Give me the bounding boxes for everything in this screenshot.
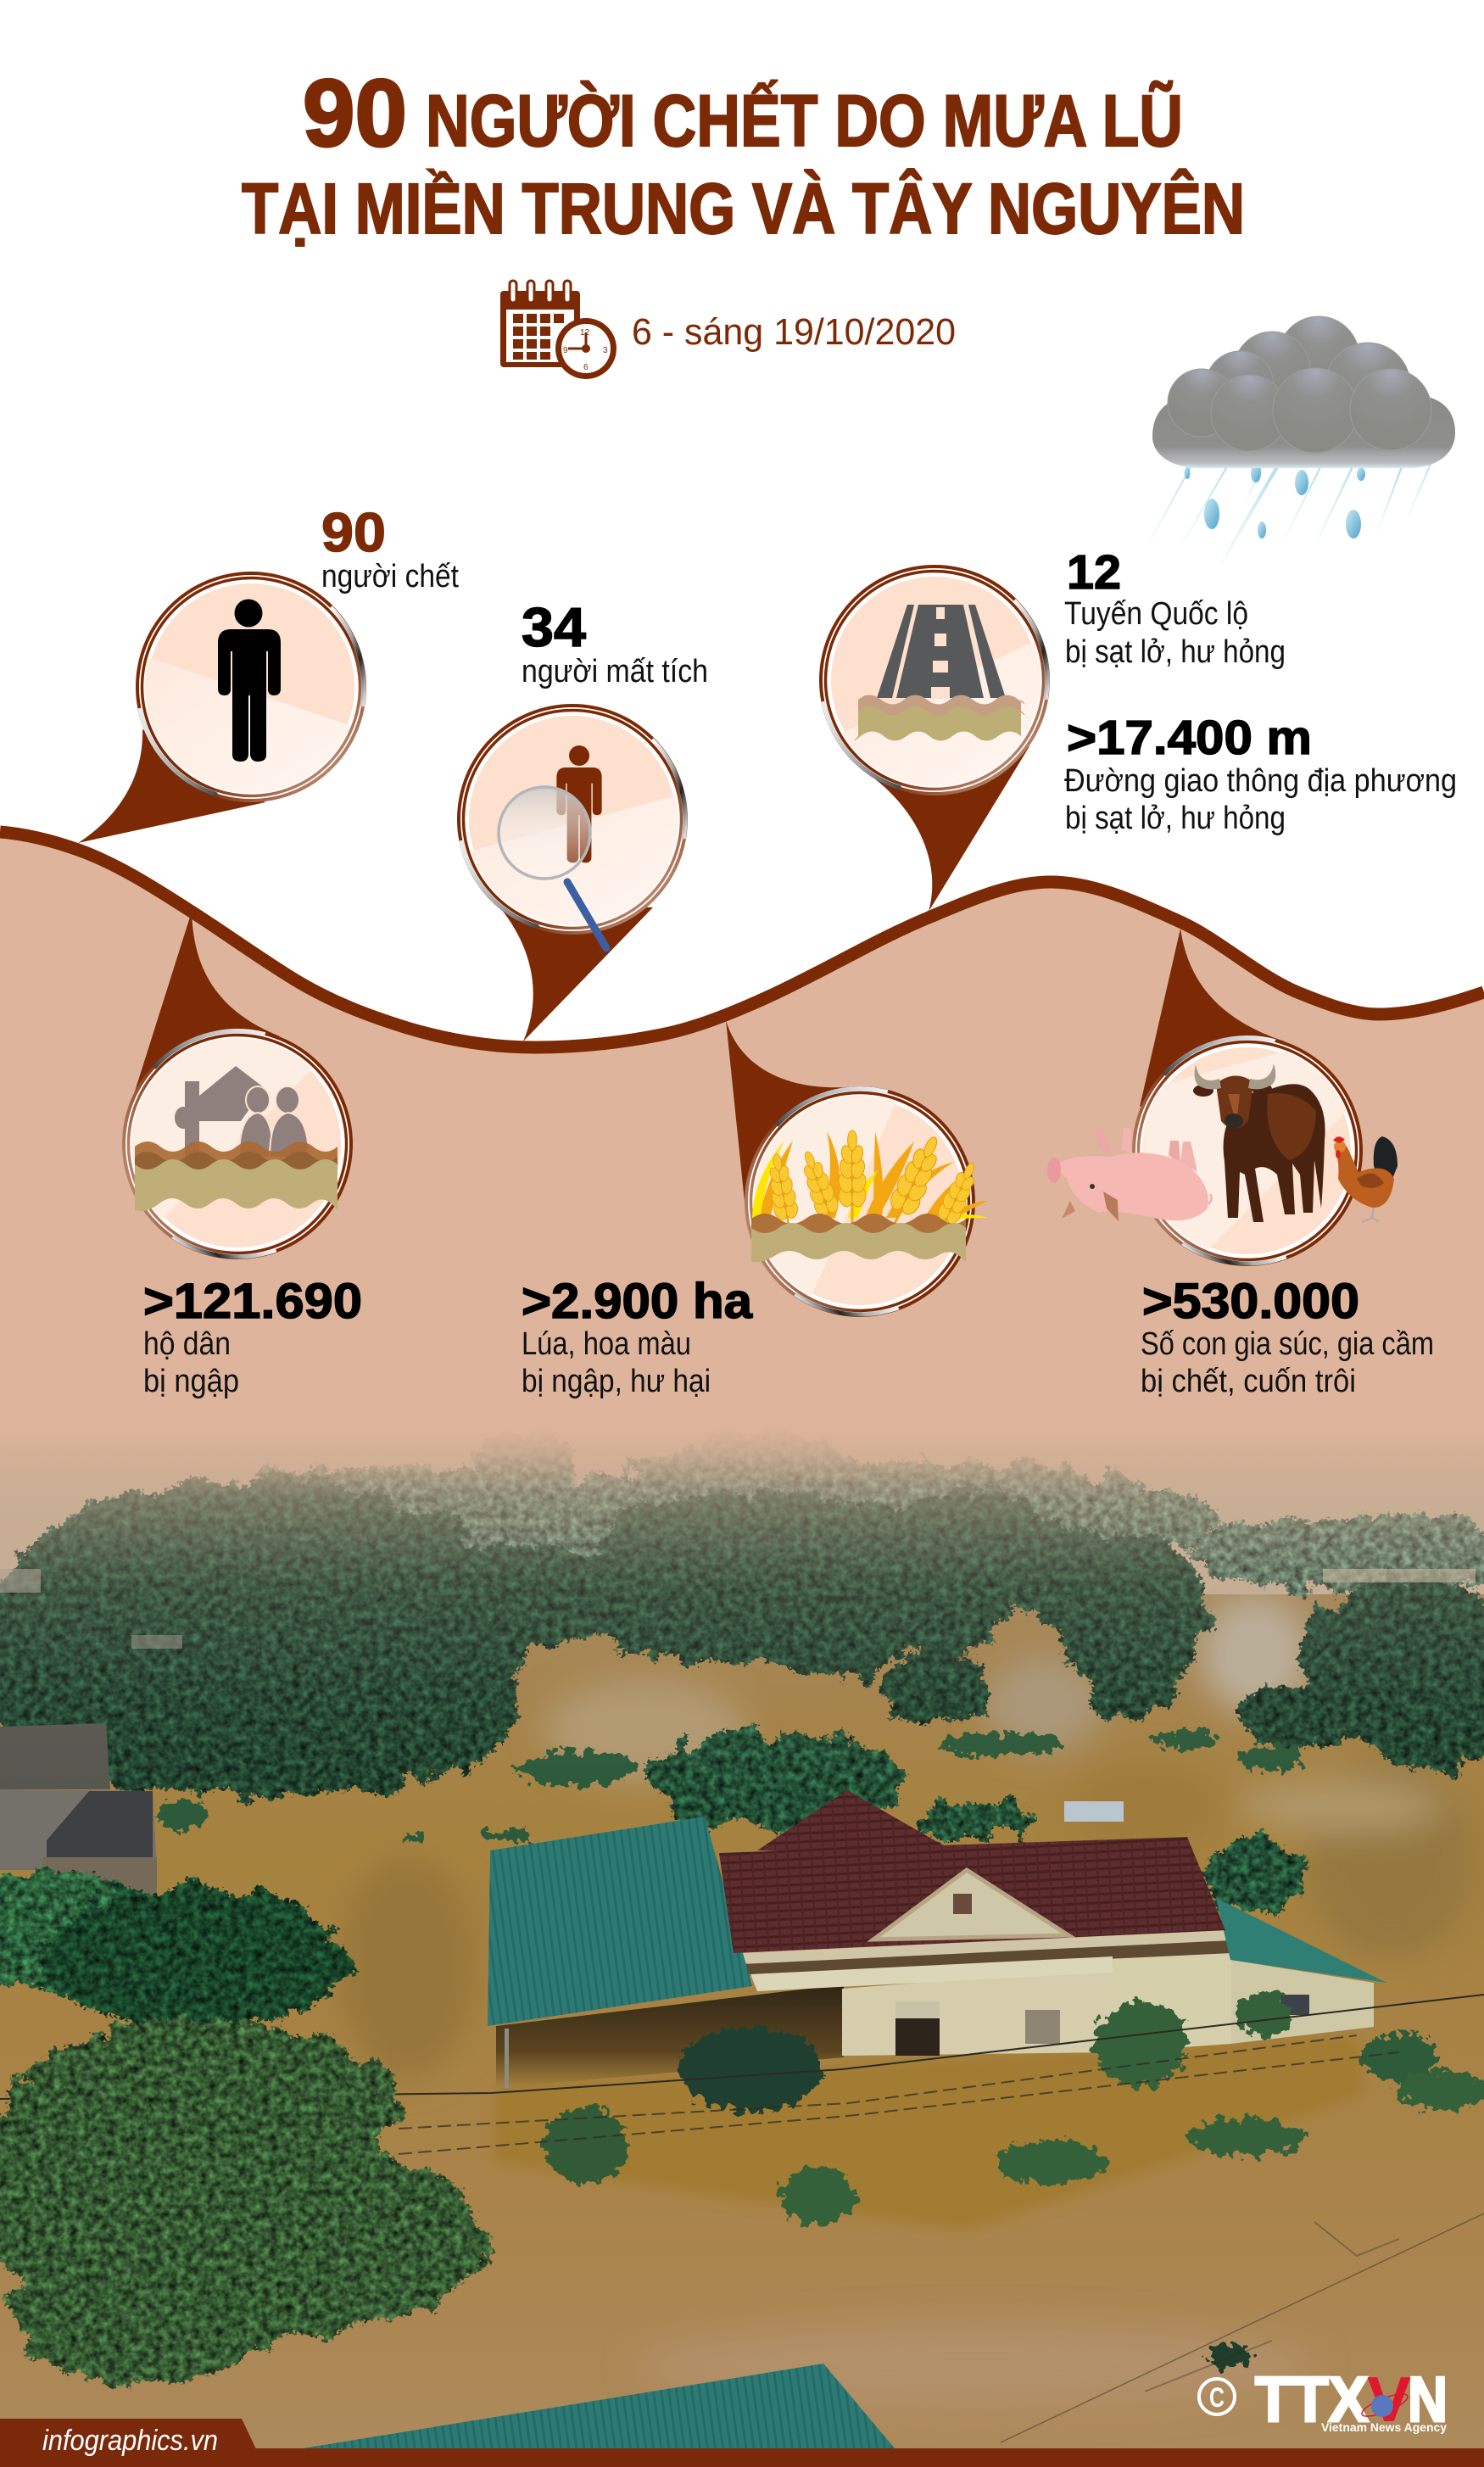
logo: TTXVN: N [1408, 2364, 1448, 2435]
stat: damaged crops: bị ngập, hư hại [522, 1364, 711, 1399]
flood photograph [0, 1425, 1484, 2467]
panel: people killed [78, 572, 366, 843]
tan terrain area [0, 832, 1484, 1459]
logo: TTXVN: Vietnam News Agency [1321, 2420, 1447, 2434]
pin disc [819, 565, 1050, 795]
upper tree masses [0, 1476, 1484, 1798]
source tag: infographics.vn [42, 2425, 218, 2457]
pin tail [78, 729, 265, 843]
bush and shrubs in front of house [543, 1992, 1484, 2369]
bottom teal roof [303, 2364, 895, 2448]
wave outline [0, 832, 1484, 1047]
icon: calendar and clock: 12 [580, 328, 590, 338]
icon: flooded house and people [135, 1066, 338, 1211]
pin tail [496, 903, 653, 1041]
icon: cow [1193, 1063, 1325, 1222]
utility wires [0, 1995, 1484, 2442]
pin tail [134, 912, 280, 1094]
pin disc [84, 991, 391, 1298]
stat: national roads and local roads [1064, 545, 1457, 836]
icon: calendar and clock: 9 [563, 346, 568, 355]
source tag [0, 2419, 257, 2467]
left buildings [0, 1723, 157, 1908]
logo: TTXVN [1199, 2364, 1448, 2435]
tree behind the house [649, 1732, 1310, 1910]
stat: flooded households [143, 1274, 362, 1399]
pin disc [136, 572, 366, 802]
stat: national roads and local roads: 12 [1067, 545, 1121, 600]
stat: national roads and local roads: Tuyến Quốc lộ [1064, 596, 1248, 632]
pin disc [1094, 997, 1401, 1304]
distant tree line [59, 1429, 1484, 1603]
icon: person [218, 629, 281, 762]
stat: damaged crops [522, 1274, 753, 1399]
house [488, 1790, 1386, 2088]
pin gloss [750, 1091, 901, 1312]
house reflection in water [494, 2035, 1365, 2230]
icon: pig [1047, 1127, 1212, 1221]
pin disc [706, 1048, 1013, 1355]
pin tail [873, 746, 1029, 912]
stat: national roads and local roads: bị sạt lở, hư hỏng [1065, 801, 1286, 836]
title: NGƯỜI CHẾT DO MƯA LŨ [426, 81, 1183, 162]
stat: damaged crops: >2.900 ha [522, 1274, 753, 1329]
icon: person head [234, 599, 263, 628]
far buildings [0, 1569, 1476, 1649]
pin tail [1140, 929, 1285, 1107]
stat: national roads and local roads: bị sạt lở, hư hỏng [1065, 634, 1286, 670]
logo: TTXVN: C [1209, 2382, 1225, 2413]
logo: TTXVN: V [1367, 2364, 1411, 2435]
pin tail [726, 1020, 890, 1204]
icon: rain cloud [1149, 316, 1455, 564]
stat: 34 missing [522, 596, 708, 689]
title [242, 60, 1245, 248]
left trees [0, 1874, 348, 2031]
icon: damaged road [854, 605, 1025, 741]
panel: flooded households [84, 912, 391, 1298]
stat: flooded households: bị ngập [143, 1364, 239, 1399]
stat: damaged crops: Lúa, hoa màu [522, 1326, 691, 1362]
pin disc [457, 704, 688, 935]
icon: calendar and clock [500, 281, 616, 379]
foreground tree [0, 2023, 488, 2381]
panel: damaged crops [706, 1020, 1013, 1355]
stat: national roads and local roads: >17.400 m [1067, 711, 1312, 765]
small flooded shrubs [157, 1729, 1302, 1843]
date text: 6 - sáng 19/10/2020 [632, 311, 956, 353]
stat: livestock [1141, 1274, 1434, 1399]
panel: livestock [1047, 929, 1401, 1304]
stat: livestock: >530.000 [1142, 1274, 1359, 1329]
icon: calendar and clock: 3 [603, 346, 608, 355]
stat: livestock: bị chết, cuốn trôi [1141, 1364, 1356, 1399]
icon: missing person [556, 745, 602, 862]
stat: flooded households: >121.690 [143, 1274, 362, 1329]
footer bar [0, 2448, 1484, 2467]
stat: 34 missing: người mất tích [522, 654, 708, 689]
stat: flooded households: hộ dân [143, 1326, 231, 1362]
pin gloss [1137, 1041, 1358, 1261]
icon: chicken [1333, 1136, 1398, 1222]
stat: 90 killed: 90 [321, 501, 386, 563]
icon: calendar and clock: 6 [583, 363, 589, 372]
icon: wheat [751, 1130, 988, 1262]
title: TẠI MIỀN TRUNG VÀ TÂY NGUYÊN [242, 169, 1245, 248]
logo: TTXVN: TTX [1255, 2364, 1369, 2435]
date with calendar icon [500, 281, 956, 379]
stat: 90 killed [321, 501, 459, 594]
pin gloss [127, 1034, 348, 1254]
icon: magnifying glass [499, 787, 606, 948]
stat: 34 missing: 34 [522, 596, 586, 658]
panel: roads [819, 565, 1050, 912]
title: 90 [303, 60, 407, 166]
panel: people missing [457, 704, 688, 1041]
stat: livestock: Số con gia súc, gia cầm [1141, 1326, 1434, 1362]
fog overlay [0, 1425, 1484, 1723]
stat: 90 killed: người chết [321, 559, 459, 594]
